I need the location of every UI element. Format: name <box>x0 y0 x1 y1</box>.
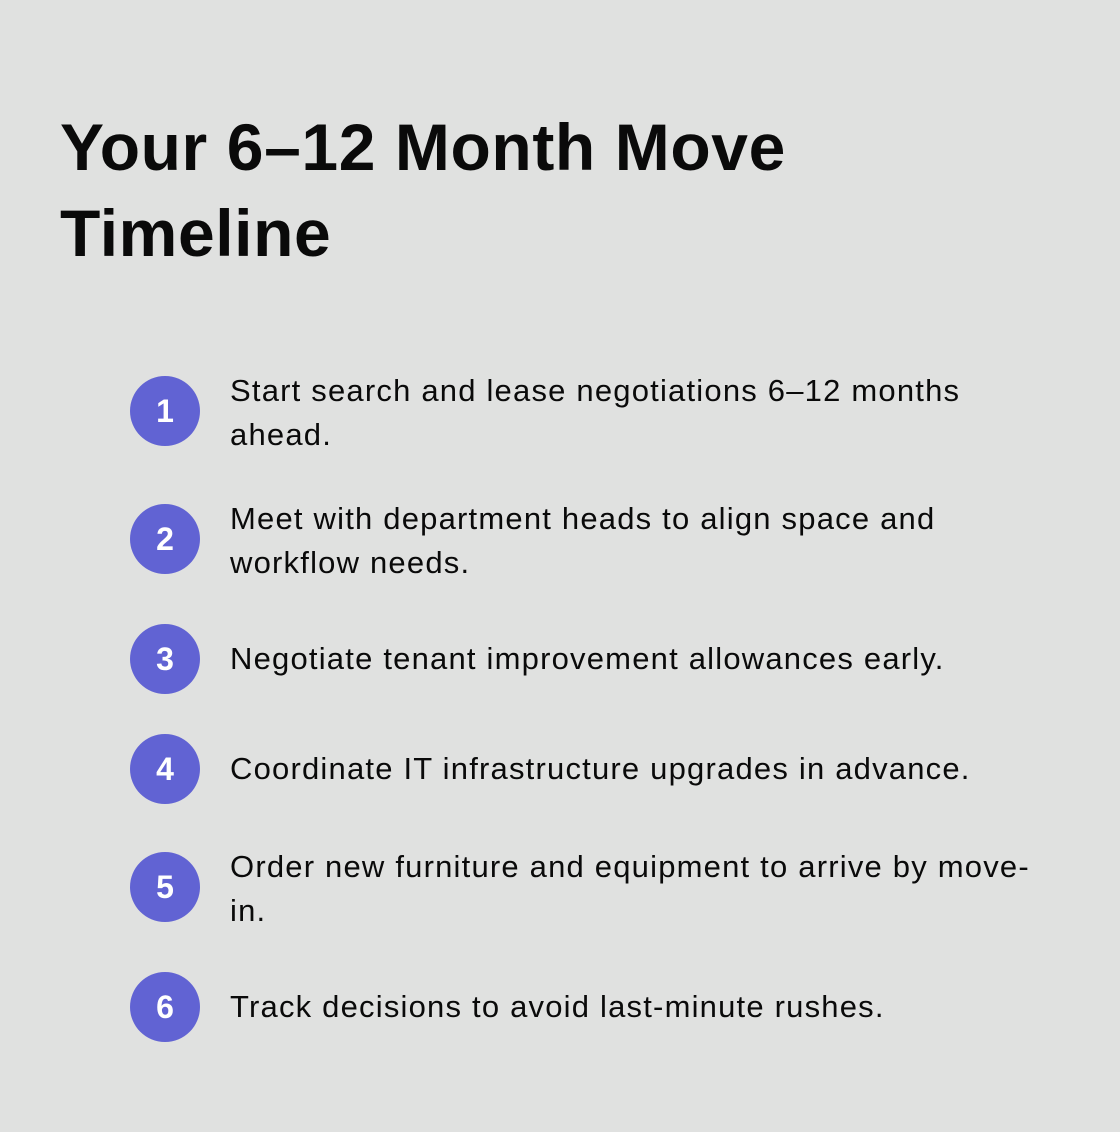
text: step 5 <box>230 849 1030 928</box>
text: step 2: workflow needs. <box>230 545 470 580</box>
icon: number 4: 4 <box>156 751 174 787</box>
text: step 5: in. <box>230 893 266 928</box>
icon: number 6: 6 <box>156 989 174 1025</box>
title: Your 6–12 Month Move <box>60 110 786 184</box>
text: step 6: Track decisions to avoid last-minute rushes. <box>230 989 885 1024</box>
text: step 2: Meet with department heads to align space and <box>230 501 935 536</box>
text: step 5: Order new furniture and equipment to arrive by move- <box>230 849 1030 884</box>
title <box>60 110 786 270</box>
step 5 <box>130 849 1030 928</box>
text: step 1: ahead. <box>230 417 332 452</box>
icon: number 2 <box>130 504 200 574</box>
step 3 <box>130 624 945 694</box>
icon: number 6 <box>130 972 200 1042</box>
icon: number 3 <box>130 624 200 694</box>
text: step 2 <box>230 501 935 580</box>
icon: number 5: 5 <box>156 869 174 905</box>
icon: number 1 <box>130 376 200 446</box>
step 4 <box>130 734 971 804</box>
icon: number 5 <box>130 852 200 922</box>
title: Timeline <box>60 196 331 270</box>
text: step 1 <box>230 373 960 452</box>
icon: number 1: 1 <box>156 393 174 429</box>
icon: number 2: 2 <box>156 521 174 557</box>
text: step 1: Start search and lease negotiations 6–12 months <box>230 373 960 408</box>
icon: number 4 <box>130 734 200 804</box>
text: step 3: Negotiate tenant improvement allowances early. <box>230 641 945 676</box>
text: step 4: Coordinate IT infrastructure upgrades in advance. <box>230 751 971 786</box>
step 6 <box>130 972 885 1042</box>
step 2 <box>130 501 935 580</box>
step 1 <box>130 373 960 452</box>
icon: number 3: 3 <box>156 641 174 677</box>
